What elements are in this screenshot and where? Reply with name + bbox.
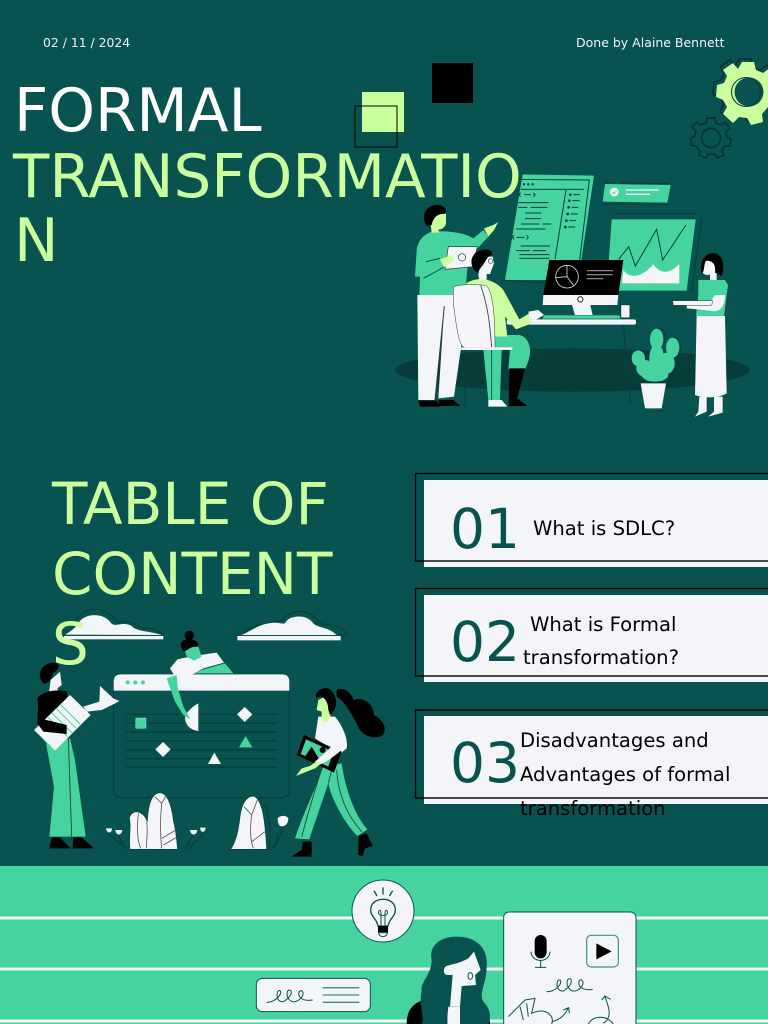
walking woman <box>292 688 385 857</box>
header date: 02 / 11 / 2024 <box>43 35 130 50</box>
standing woman <box>673 253 728 417</box>
browser window <box>114 674 289 798</box>
clouds <box>64 609 347 640</box>
contents item 03 <box>416 710 768 820</box>
illustration: team at computer <box>395 174 750 417</box>
media board <box>504 912 636 1024</box>
icon: dark gear <box>691 118 731 158</box>
line chart panel <box>607 213 702 291</box>
contents item 02 <box>416 588 768 682</box>
leaning woman <box>167 631 233 719</box>
contents item 02: What is Formal <box>530 613 676 636</box>
table of contents heading: S <box>52 610 89 678</box>
bottom green band <box>0 866 768 1024</box>
contents item 02: transformation? <box>523 646 679 669</box>
chair back legs <box>465 348 492 407</box>
header author: Done by Alaine Bennett <box>576 35 725 50</box>
icon: light bulb <box>352 880 414 942</box>
illustration: creative woman with media board <box>256 880 636 1024</box>
desk <box>507 305 636 405</box>
contents item 01: 01 <box>450 497 520 561</box>
man with megaphone <box>34 663 119 848</box>
message pill <box>256 978 370 1012</box>
contents item 03: 03 <box>450 731 520 795</box>
title: TRANSFORMATIO <box>12 143 522 212</box>
monitor <box>543 260 623 315</box>
plant <box>631 328 681 408</box>
plants <box>106 793 288 849</box>
contents item 03: Disadvantages and <box>520 729 709 752</box>
chair <box>453 285 512 350</box>
illustration: team planning board <box>34 609 385 857</box>
code panel <box>501 174 594 285</box>
icon: lime gear <box>713 59 768 125</box>
contents item 01: What is SDLC? <box>533 517 675 540</box>
table of contents heading: TABLE OF <box>51 470 329 538</box>
decorative squares <box>355 63 473 147</box>
contents item 01 <box>416 474 768 567</box>
floor shadow <box>395 348 750 392</box>
title: N <box>14 207 59 276</box>
title: FORMAL <box>14 77 262 146</box>
table of contents heading: CONTENT <box>52 540 333 608</box>
seated man <box>466 249 544 407</box>
contents item 02: 02 <box>450 610 520 674</box>
notification card <box>603 183 671 204</box>
contents item 03: transformation <box>520 797 666 820</box>
standing man <box>415 205 498 407</box>
contents item 03: Advantages of formal <box>520 763 730 786</box>
woman <box>407 937 490 1024</box>
